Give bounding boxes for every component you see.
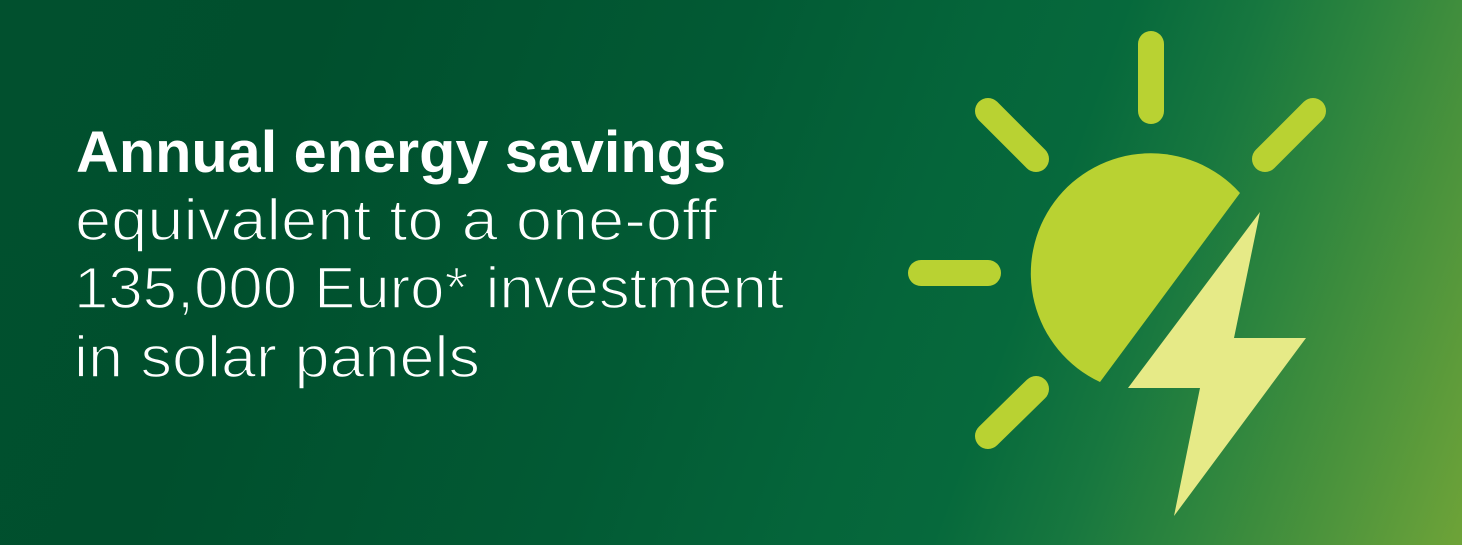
icon: sun with lightning bolt <box>921 44 1313 516</box>
icon: sun rays <box>921 44 1313 436</box>
heading: Annual energy savings <box>76 120 726 185</box>
text block <box>74 120 784 390</box>
line: solar panels: in solar panels <box>74 325 480 390</box>
icon: lightning bolt <box>1128 212 1306 516</box>
icon: half sun <box>1031 153 1240 382</box>
line: amount: 135,000 Euro* investment <box>74 256 784 321</box>
line: equivalent: equivalent to a one-off <box>75 188 718 253</box>
